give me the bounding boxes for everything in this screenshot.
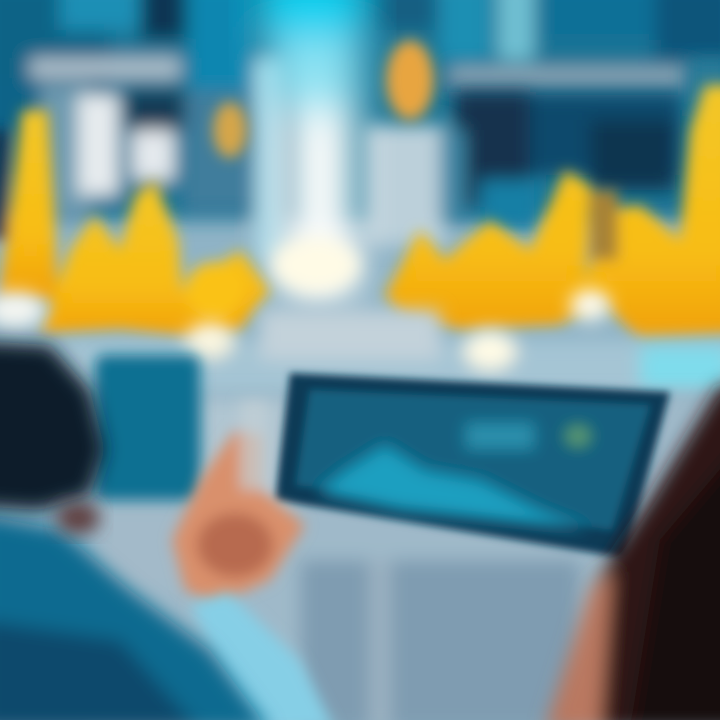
sleeve [190,592,335,720]
lower light band [0,237,720,395]
yellow flames [0,40,720,340]
right dark panels [365,60,720,245]
lower background: desk [90,395,720,720]
tablet [275,373,670,558]
upper background: city towers [0,0,720,260]
right foreground figure [545,385,720,720]
person neck [56,502,100,534]
tablet chart [318,445,590,530]
hand [172,400,305,605]
person head [0,340,105,510]
background screen [95,355,200,500]
person shoulder [0,515,270,720]
central light beam [260,0,365,300]
